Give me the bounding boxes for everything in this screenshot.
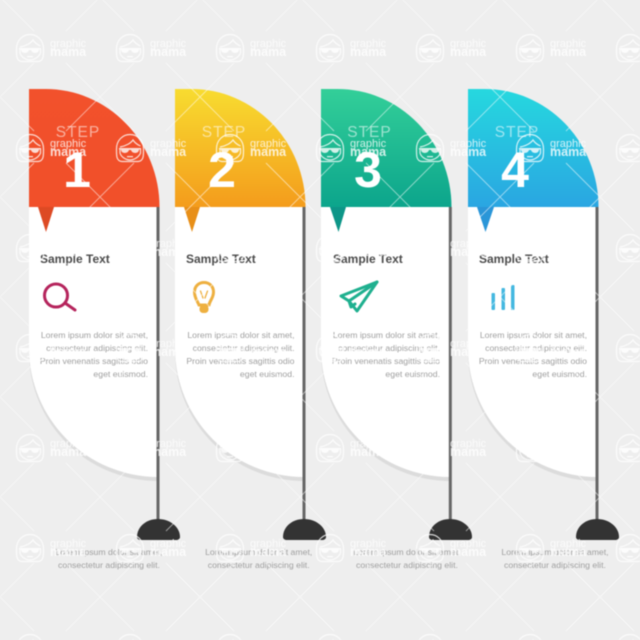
watermark logos: graphic: [250, 338, 287, 350]
body text 2: Lorem ipsum dolor sit amet,: [187, 330, 294, 340]
caption 2: consectetur adipiscing elit.: [208, 560, 310, 570]
watermark logos: mama: [450, 345, 487, 359]
body text 3: eget euismod.: [385, 369, 440, 379]
body text 2: [186, 330, 295, 379]
caption 4: Lorem ipsum dolor sit amet,: [501, 547, 609, 557]
watermark logos: graphic: [450, 238, 487, 250]
body text 3: Proin venenatis sagittis odio: [332, 356, 440, 366]
icon: signal bars: [492, 285, 514, 310]
panel: step 2 flag: [175, 89, 326, 570]
flag shadow 1: [29, 300, 158, 481]
flag pole 1: [156, 207, 160, 521]
watermark logos: graphic: [350, 138, 387, 150]
watermark logos: mama: [350, 545, 387, 559]
watermark logos: graphic: [350, 438, 387, 450]
body text 1: eget euismod.: [93, 369, 148, 379]
step number 1: 1: [63, 142, 91, 198]
caption 3: [353, 547, 461, 570]
caption 3: Lorem ipsum dolor sit amet,: [353, 547, 461, 557]
flag pole 3: [449, 207, 452, 521]
watermark logos: graphic: [50, 538, 87, 550]
body text 2: Proin venenatis sagittis odio: [186, 356, 295, 366]
watermark logos: graphic: [450, 338, 487, 350]
caption 1: consectetur adipiscing elit.: [58, 560, 160, 570]
watermark logos: graphic: [150, 238, 187, 250]
watermark logos: mama: [350, 245, 387, 259]
icon: magnifier: [44, 284, 75, 310]
body text 4: consectetur adipiscing elit.: [485, 343, 587, 353]
step label 4: STEP: [495, 124, 539, 141]
watermark logos: mama: [450, 245, 487, 259]
watermark logos: mama: [150, 45, 187, 59]
body text 2: consectetur adipiscing elit.: [193, 343, 294, 353]
pointer 1: [38, 207, 54, 232]
heading 1: Sample Text: [40, 252, 110, 266]
watermark logos: mama: [550, 245, 587, 259]
watermark logos: graphic: [550, 538, 587, 550]
flag head 3: [321, 89, 452, 207]
watermark logos: graphic: [550, 138, 587, 150]
watermark logos: graphic: [350, 338, 387, 350]
watermark logos: mama: [50, 545, 87, 559]
flag pole 4: [596, 207, 598, 521]
body text 1: Lorem ipsum dolor sit amet,: [41, 330, 148, 340]
body text 2: eget euismod.: [240, 369, 294, 379]
watermark logos: graphic: [250, 38, 287, 50]
watermark logos: mama: [150, 245, 187, 259]
watermark logos: graphic: [250, 538, 287, 550]
watermark logos: mama: [150, 145, 187, 159]
body text 1: Proin venenatis sagittis odio: [40, 356, 148, 366]
body text 3: [332, 330, 440, 379]
body text 3: consectetur adipiscing elit.: [338, 343, 440, 353]
watermark logos: mama: [550, 145, 587, 159]
pole base 2: [283, 519, 326, 540]
heading 2: Sample Text: [186, 252, 256, 266]
watermark logos: graphic: [150, 138, 187, 150]
step label 1: STEP: [56, 124, 100, 141]
pole base 4: [576, 519, 619, 540]
flag shadow 3: [321, 300, 450, 481]
watermark logos: mama: [50, 145, 87, 159]
flag head 2: [175, 89, 306, 207]
flag shadow 4: [468, 300, 597, 481]
watermark logos: mama: [450, 445, 487, 459]
icon: light bulb: [194, 282, 214, 313]
watermark logos: mama: [150, 445, 187, 459]
watermark logos: graphic: [50, 38, 87, 50]
watermark logos: graphic: [550, 38, 587, 50]
body text 4: Proin venenatis sagittis odio: [479, 356, 587, 366]
watermark logos: mama: [250, 345, 287, 359]
watermark logos: mama: [50, 45, 87, 59]
watermark logos: graphic: [550, 238, 587, 250]
watermark logos: graphic: [450, 38, 487, 50]
watermark logos: graphic: [150, 38, 187, 50]
watermark logos: mama: [550, 545, 587, 559]
flag body 2: [175, 207, 304, 477]
watermark logos: graphic: [50, 138, 87, 150]
watermark logos: mama: [350, 345, 387, 359]
watermark logos: graphic: [250, 138, 287, 150]
step label 2: STEP: [202, 124, 246, 141]
caption 3: consectetur adipiscing elit.: [356, 560, 458, 570]
icon: paper plane: [341, 282, 377, 311]
watermark logos: graphic: [350, 38, 387, 50]
body text 4: [479, 330, 587, 379]
caption 1: [55, 547, 163, 570]
watermark logos: graphic: [550, 338, 587, 350]
watermark logos: mama: [250, 145, 287, 159]
heading 3: Sample Text: [333, 252, 403, 266]
flag shadow 2: [175, 300, 304, 481]
watermark logos: mama: [450, 45, 487, 59]
watermark logos: mama: [150, 545, 187, 559]
body text 4: Lorem ipsum dolor sit amet,: [480, 330, 587, 340]
watermark logos: graphic: [450, 538, 487, 550]
flag pole 2: [302, 207, 306, 521]
step number 3: 3: [354, 142, 382, 198]
step number 2: 2: [208, 142, 236, 198]
pointer 2: [184, 207, 200, 232]
watermark logos: graphic: [450, 138, 487, 150]
watermark logos: mama: [350, 145, 387, 159]
flag head 1: [29, 89, 160, 207]
watermark logos: graphic: [250, 438, 287, 450]
body text 3: Lorem ipsum dolor sit amet,: [333, 330, 440, 340]
pointer 4: [477, 207, 494, 232]
watermark logos: mama: [350, 45, 387, 59]
watermark logos: mama: [450, 145, 487, 159]
watermark logos: mama: [350, 445, 387, 459]
watermark logos: graphic: [150, 438, 187, 450]
panel: step 3 flag: [321, 89, 472, 570]
watermark logos: graphic: [250, 238, 287, 250]
watermark logos: mama: [50, 245, 87, 259]
caption 1: Lorem ipsum dolor sit amet,: [55, 547, 163, 557]
panel: step 4 flag: [468, 89, 619, 570]
watermark logos: mama: [250, 545, 287, 559]
pointer 3: [330, 207, 346, 232]
heading 4: Sample Text: [479, 252, 549, 266]
watermark logos: mama: [450, 545, 487, 559]
pole base 1: [137, 519, 180, 540]
body text 1: consectetur adipiscing elit.: [46, 343, 148, 353]
pole base 3: [429, 519, 472, 540]
body text 4: eget euismod.: [532, 369, 587, 379]
flag body 1: [29, 207, 158, 477]
watermark logos: graphic: [50, 338, 87, 350]
watermark logos: graphic: [350, 238, 387, 250]
caption 2: [205, 547, 312, 570]
watermark logos: graphic: [50, 438, 87, 450]
watermark logos: graphic: [150, 338, 187, 350]
watermark logos: mama: [50, 445, 87, 459]
watermark logos: mama: [250, 445, 287, 459]
flag head 4: [468, 89, 598, 207]
caption 4: [501, 547, 609, 570]
watermark logos: graphic: [150, 538, 187, 550]
body text 1: [40, 330, 148, 379]
watermark logos: graphic: [350, 538, 387, 550]
watermark logos: mama: [250, 45, 287, 59]
watermark logos: mama: [250, 245, 287, 259]
watermark logos: graphic: [450, 438, 487, 450]
watermark logos: mama: [50, 345, 87, 359]
watermark logos: mama: [150, 345, 187, 359]
flag body 3: [321, 207, 450, 477]
caption 4: consectetur adipiscing elit.: [504, 560, 606, 570]
watermark logos: graphic: [550, 438, 587, 450]
step number 4: 4: [501, 142, 529, 198]
step label 3: STEP: [347, 124, 392, 141]
caption 2: Lorem ipsum dolor sit amet,: [205, 547, 312, 557]
flag body 4: [468, 207, 597, 477]
panel: step 1 flag: [29, 89, 180, 570]
watermark logos: graphic: [50, 238, 87, 250]
watermark logos: mama: [550, 45, 587, 59]
watermark logos: mama: [550, 345, 587, 359]
watermark logos: mama: [550, 445, 587, 459]
